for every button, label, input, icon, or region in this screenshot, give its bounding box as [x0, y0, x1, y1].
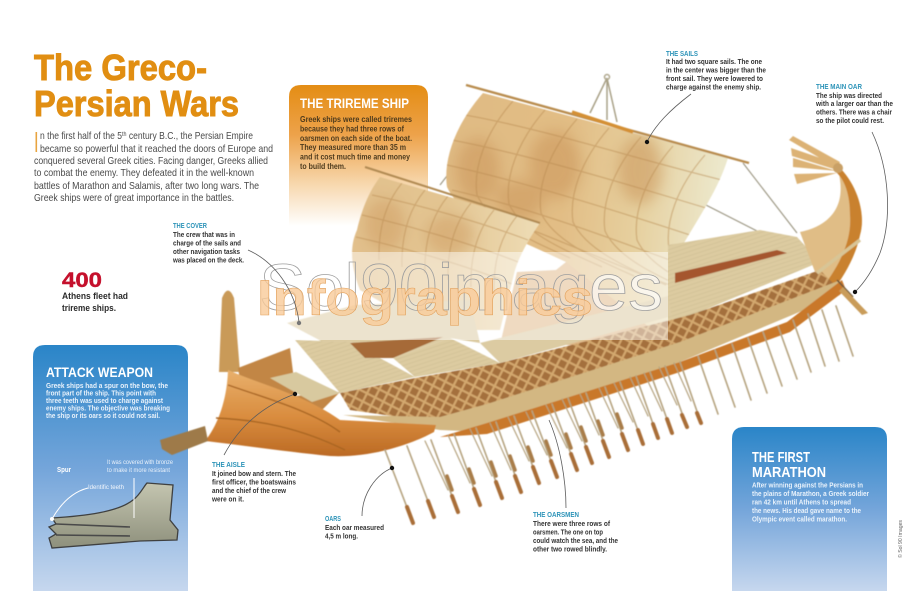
panel: the trireme ship: because they had three rows of: [300, 124, 404, 134]
illustration: trireme ship: [160, 74, 868, 523]
panel: the first marathon: Olympic event called marathon.: [752, 514, 847, 524]
stat: 400 ships: 400: [62, 269, 102, 292]
title: The Greco-: [34, 47, 207, 88]
panel: the first marathon: ran 42 km until Athens to spread: [752, 498, 851, 506]
panel: the trireme ship: Greek ships were called triremes: [300, 115, 412, 124]
callout: the cover: charge of the sails and: [173, 238, 241, 248]
intro text: [34, 131, 273, 204]
intro text: became so powerful that it reached the doors of Europe and: [40, 144, 273, 155]
callout: the cover: THE COVER: [173, 223, 207, 230]
stays and ropes: [440, 163, 797, 233]
callout: the sails: THE SAILS: [666, 51, 698, 58]
panel: attack weapon: Greek ships had a spur on the bow, the: [46, 381, 168, 390]
callout: oars: 4,5 m long.: [325, 532, 358, 540]
oars: [385, 306, 853, 523]
canopy right: [480, 296, 672, 363]
panel: the trireme ship: and it cost much time and money: [300, 152, 410, 162]
copyright: © Sol 90 Images: [897, 519, 904, 558]
front sail: [352, 167, 540, 330]
panel: attack weapon: ATTACK WEAPON: [46, 364, 153, 380]
panel: the first marathon: the plains of Marathon, a Greek soldier: [752, 489, 869, 498]
panel: the first marathon: After winning against the Persians in: [752, 480, 863, 490]
panel: attack weapon: three teeth was used to charge against: [46, 396, 163, 405]
callout: oars: Each oar measured: [325, 523, 384, 532]
callout: the main oar: The ship was directed: [816, 91, 882, 100]
callout: the sails: [666, 51, 766, 92]
stat: 400 ships: Athens fleet had: [62, 291, 128, 301]
bow interior: [238, 348, 340, 412]
intro text: century B.C., the Persian Empire: [126, 131, 253, 142]
callout: the oarsmen: other two rowed blindly.: [533, 544, 607, 554]
intro text: n the first half of the 5: [40, 131, 140, 142]
mast top: [590, 74, 617, 122]
panel: the first marathon: the news. His dead gave name to the: [752, 506, 861, 515]
panel: the trireme ship: [289, 85, 428, 226]
callout dots: [293, 140, 857, 470]
callout: the main oar: THE MAIN OAR: [816, 84, 862, 91]
callout: the aisle: It joined bow and stern. The: [212, 469, 296, 478]
callout: the aisle: and the chief of the crew: [212, 486, 286, 495]
callout: the oarsmen: [533, 512, 618, 554]
callout: the cover: was placed on the deck.: [172, 256, 244, 264]
ram: [160, 426, 208, 455]
oar bench strip: [343, 281, 840, 432]
canopy left: [287, 300, 480, 358]
callout: the aisle: first officer, the boatswains: [212, 478, 296, 486]
callout: the oarsmen: THE OARSMEN: [533, 512, 579, 519]
panel: attack weapon: to make it more resistant: [107, 467, 170, 474]
deck opening: [350, 337, 443, 358]
callout: the cover: other navigation tasks: [173, 247, 240, 256]
panel: the trireme ship: THE TRIREME SHIP: [300, 95, 409, 111]
panel: attack weapon: the ship or its oars so it could not sail.: [46, 411, 160, 420]
watermark: Infographics: [257, 270, 593, 326]
watermark: Sol90imag es: [259, 250, 663, 324]
callout: the main oar: [815, 84, 893, 125]
panel: attack weapon: It was covered with bronze: [107, 459, 173, 466]
stat: 400 ships: [62, 269, 128, 313]
stern post: [789, 136, 862, 300]
large sail: [446, 85, 762, 345]
callout: the aisle: THE AISLE: [212, 462, 245, 469]
intro text: Greek ships were of great importance in the battles.: [34, 193, 234, 204]
intro text: th: [122, 131, 127, 138]
title: [34, 47, 239, 124]
callout: the oarsmen: oarsmen. The one on top: [533, 528, 603, 536]
callout: the aisle: [211, 462, 296, 504]
panel: the first marathon: MARATHON: [752, 465, 826, 481]
mid deck: [393, 338, 500, 377]
callout: the cover: The crew that was in: [173, 230, 235, 239]
callout: oars: [325, 516, 384, 540]
callout: the oarsmen: could watch the sea, and the: [533, 536, 618, 545]
panel: the trireme ship: to build them.: [300, 162, 346, 171]
main deck: [295, 340, 415, 393]
callout: the sails: front sail. They were lowered to: [666, 74, 763, 83]
callout: the sails: It had two square sails. The one: [666, 57, 762, 66]
hull side rail: [440, 280, 846, 437]
panel: the trireme ship: They measured more than 35 m: [300, 143, 406, 152]
callout: the oarsmen: There were three rows of: [533, 519, 610, 528]
callout: the aisle: were on it.: [211, 494, 244, 504]
foredeck: [270, 372, 340, 402]
callout: the main oar: so the pilot could rest.: [816, 116, 884, 125]
title: Persian Wars: [34, 83, 239, 124]
callout: the main oar: others. There was a chair: [816, 108, 892, 116]
lattice between decks: [340, 270, 835, 420]
callout: the sails: charge against the enemy ship.: [666, 82, 761, 92]
callout: oars: OARS: [325, 516, 341, 523]
spur labels: Spur: [57, 467, 71, 474]
lower sail behind watermark: [500, 250, 680, 345]
bow stem post: [219, 290, 240, 372]
intro text: to combat the enemy. They defeated it in the well-known: [34, 168, 254, 179]
intro text: battles of Marathon and Salamis, after two long wars. The: [34, 181, 259, 192]
panel: the trireme ship: oarsmen on each side of the boat.: [300, 134, 412, 143]
callout: the main oar: with a larger oar than the: [815, 99, 893, 108]
panel: the first marathon: THE FIRST: [752, 450, 810, 466]
panel: attack weapon: front part of the ship. This point with: [46, 388, 156, 398]
panel: the first marathon: [732, 427, 887, 591]
panel: attack weapon: Identific teeth: [88, 484, 124, 491]
icon: bronze spur: [49, 478, 178, 548]
panel: attack weapon: [33, 345, 188, 591]
panel: attack weapon: enemy ships. The objective was breaking: [46, 404, 170, 412]
intro text: conquered several Greek cities. Facing danger, Greeks allied: [34, 156, 268, 167]
steering oar: [817, 240, 868, 315]
callout: the cover: [172, 223, 244, 264]
callout: the sails: in the center was bigger than the: [666, 66, 766, 74]
callout leaders: [224, 94, 888, 516]
hull bow: [205, 370, 436, 456]
rear deck roofs: [668, 230, 820, 320]
stat: 400 ships: trireme ships.: [62, 303, 116, 313]
